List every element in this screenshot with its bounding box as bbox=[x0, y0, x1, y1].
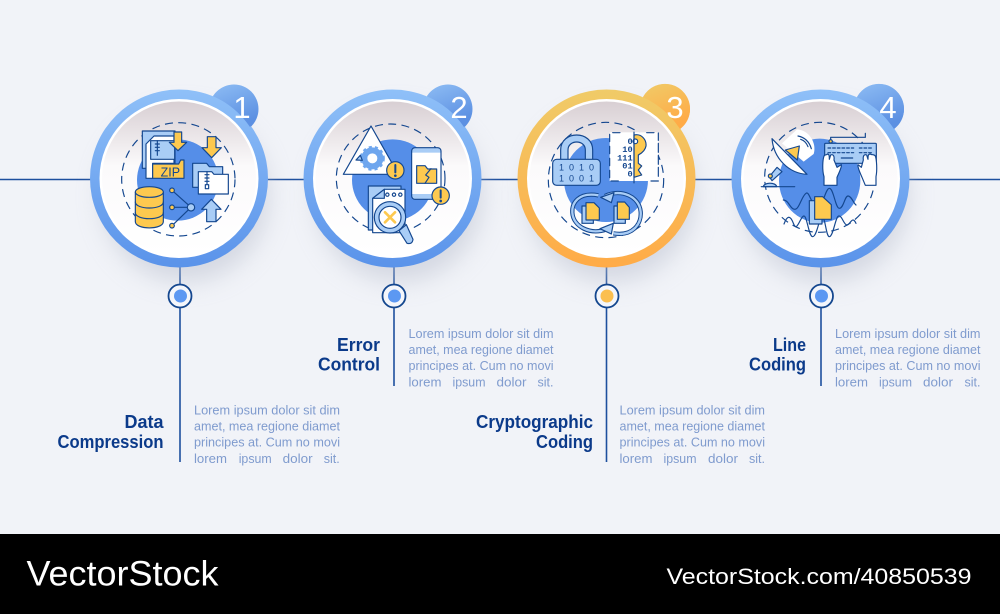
text block 4: dolor bbox=[923, 374, 954, 390]
text block 4: amet, mea regione diamet bbox=[835, 342, 981, 357]
badge number 1: 1 bbox=[233, 90, 251, 125]
text block 2: lorem bbox=[408, 374, 442, 390]
icon: zip compression bbox=[122, 123, 235, 236]
text block 3: amet, mea regione diamet bbox=[620, 418, 765, 434]
sync arrows bbox=[572, 195, 607, 231]
text block 3: principes at. Cum no movi bbox=[620, 434, 765, 450]
text block 2: principes at. Cum no movi bbox=[408, 358, 554, 373]
icon: encryption: 111 bbox=[617, 153, 633, 163]
text block 4: Lorem ipsum dolor sit dim bbox=[835, 326, 980, 341]
waves bbox=[783, 188, 856, 209]
node marker 4 bbox=[810, 284, 833, 308]
icon: zip compression: ZIP bbox=[161, 165, 180, 180]
text block 3 bbox=[620, 402, 765, 466]
text block 1 bbox=[194, 402, 340, 466]
text block 4: lorem bbox=[835, 374, 868, 390]
text block 2: dolor bbox=[496, 374, 527, 390]
heading 3 bbox=[476, 411, 593, 452]
ring 4 bbox=[732, 84, 910, 268]
text block 3: sit. bbox=[749, 451, 765, 466]
text block 1: ipsum bbox=[239, 451, 272, 466]
dish bbox=[772, 139, 807, 174]
text block 2: Lorem ipsum dolor sit dim bbox=[408, 326, 554, 341]
number badge 2 bbox=[424, 84, 472, 134]
step 4: line coding bbox=[732, 84, 981, 389]
heading 1 bbox=[58, 411, 164, 452]
heading 2: Error bbox=[337, 334, 380, 355]
icon: encryption: 10 bbox=[622, 145, 633, 155]
text block 4 bbox=[835, 326, 981, 390]
connector line 4 bbox=[820, 262, 822, 386]
connector line 2 bbox=[393, 262, 395, 386]
node marker 2 bbox=[382, 284, 406, 308]
heading 1: Data bbox=[124, 411, 164, 432]
shadow 4 bbox=[741, 110, 909, 282]
text block 2 bbox=[408, 326, 554, 390]
text block 1: Lorem ipsum dolor sit dim bbox=[194, 402, 340, 418]
text block 1: sit. bbox=[324, 451, 340, 466]
icon: satellite and keyboard bbox=[761, 122, 877, 237]
down arrows bbox=[169, 132, 187, 151]
icon: encryption: 0 bbox=[627, 137, 633, 147]
heading 1: Compression bbox=[58, 431, 164, 452]
text block 3: dolor bbox=[708, 451, 739, 466]
node marker 3 bbox=[596, 284, 618, 308]
heading 4: Line bbox=[773, 334, 806, 355]
footer bar bbox=[0, 534, 1000, 614]
heading 3: Cryptographic bbox=[476, 411, 593, 432]
footer logo: VectorStock bbox=[26, 554, 219, 594]
key card bbox=[610, 132, 658, 181]
footer url: VectorStock.com/40850539 bbox=[666, 564, 972, 589]
heading 2: Control bbox=[318, 354, 380, 374]
text block 2: amet, mea regione diamet bbox=[408, 342, 554, 357]
icon: encryption: 1010 bbox=[559, 162, 594, 172]
icon: encryption: 01 bbox=[622, 161, 633, 171]
padlock bbox=[561, 135, 593, 160]
icon: encryption: 1001 bbox=[559, 174, 594, 184]
text block 1: lorem bbox=[194, 451, 227, 466]
text block 3: Lorem ipsum dolor sit dim bbox=[620, 402, 765, 418]
number badge 4 bbox=[854, 84, 904, 134]
hands bbox=[823, 154, 841, 185]
badge number 3: 3 bbox=[666, 90, 684, 125]
keyboard bbox=[831, 133, 865, 143]
text block 4: sit. bbox=[964, 374, 980, 390]
ring 2 bbox=[304, 85, 482, 268]
connector line 3 bbox=[606, 262, 608, 462]
database bbox=[135, 192, 163, 228]
signal area bbox=[782, 129, 814, 162]
text block 4: ipsum bbox=[879, 374, 912, 390]
number badge 3 bbox=[640, 84, 690, 134]
text block 1: amet, mea regione diamet bbox=[194, 418, 340, 434]
node marker 1 bbox=[168, 284, 192, 308]
heading 3: Coding bbox=[536, 431, 593, 452]
heading 2 bbox=[318, 334, 380, 374]
connector line 1 bbox=[179, 262, 181, 462]
shadow 1 bbox=[101, 110, 269, 282]
text block 2: ipsum bbox=[452, 374, 486, 390]
text block 1: principes at. Cum no movi bbox=[194, 434, 340, 450]
badge number 2: 2 bbox=[450, 90, 468, 125]
text block 3: lorem bbox=[620, 451, 652, 466]
icon: encryption: 0 bbox=[627, 170, 633, 180]
text block 3: ipsum bbox=[664, 451, 696, 466]
horizontal timeline bbox=[0, 178, 1000, 180]
text block 4: principes at. Cum no movi bbox=[835, 358, 981, 373]
step 2: error control bbox=[304, 84, 554, 390]
shadow 2 bbox=[315, 110, 483, 282]
ring 3 bbox=[518, 84, 696, 268]
number badge 1 bbox=[210, 84, 258, 134]
stand bbox=[769, 167, 782, 181]
ring 1 bbox=[90, 85, 268, 268]
icon: error warnings bbox=[336, 124, 449, 244]
network bbox=[172, 190, 191, 226]
step 3: cryptographic coding bbox=[476, 84, 765, 466]
step 1: data compression bbox=[58, 84, 340, 466]
badge number 4: 4 bbox=[879, 90, 897, 125]
heading 4 bbox=[749, 334, 806, 374]
heading 4: Coding bbox=[749, 354, 806, 374]
text block 1: dolor bbox=[283, 451, 313, 466]
icon: encryption bbox=[548, 122, 664, 238]
text block 2: sit. bbox=[538, 374, 554, 390]
shadow 3 bbox=[527, 110, 695, 282]
